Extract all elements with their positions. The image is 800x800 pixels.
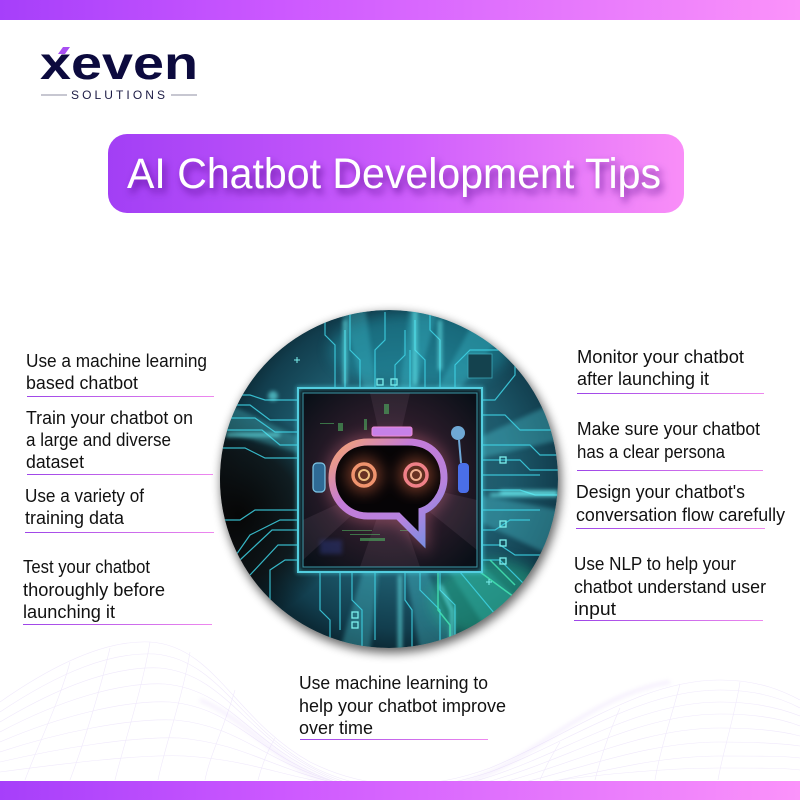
chip inner die xyxy=(303,393,477,567)
tip: monitor after launch: after launching it xyxy=(577,368,709,389)
tip: train on diverse dataset: a large and diverse xyxy=(26,429,171,450)
tip: improve over time: help your chatbot improve xyxy=(299,695,506,716)
tip: train on diverse dataset: dataset xyxy=(26,451,84,472)
robot eye glow xyxy=(346,457,434,493)
tip: test thoroughly: thoroughly before xyxy=(23,579,165,600)
tip: variety of training data: Use a variety of xyxy=(25,485,145,506)
chip outer frame xyxy=(298,388,482,572)
green data specks xyxy=(320,404,412,541)
robot antenna xyxy=(451,426,465,463)
top gradient bar xyxy=(0,0,800,20)
central circuit illustration xyxy=(220,310,558,648)
robot left ear xyxy=(313,463,325,492)
tip: variety of training data xyxy=(25,485,214,533)
tip: improve over time: Use machine learning to xyxy=(299,672,488,693)
tip: test thoroughly: Test your chatbot xyxy=(23,556,150,577)
robot top bar xyxy=(372,427,412,436)
tip: conversation flow: Design your chatbot's xyxy=(576,481,745,502)
light rays xyxy=(220,305,560,650)
title banner: AI Chatbot Development Tips xyxy=(127,150,661,198)
small chip top right xyxy=(468,354,492,378)
tip: use NLP: Use NLP to help your xyxy=(574,553,736,574)
tip: use NLP: chatbot understand user xyxy=(574,576,766,597)
tip: test thoroughly: launching it xyxy=(23,601,115,622)
tip: monitor after launch: Monitor your chatbot xyxy=(577,346,744,367)
tip: conversation flow xyxy=(576,481,786,529)
logo: Xeven Solutions: SOLUTIONS xyxy=(71,88,165,102)
tip: machine learning based chatbot: Use a machine learning xyxy=(26,350,207,371)
tip: train on diverse dataset xyxy=(26,407,213,475)
background wave mesh xyxy=(0,642,800,797)
tip: machine learning based chatbot: based chatbot xyxy=(26,372,138,393)
lower right green glow xyxy=(430,560,550,640)
tip: clear persona: Make sure your chatbot xyxy=(577,418,760,439)
robot glow xyxy=(332,442,444,540)
chip rays xyxy=(303,393,477,567)
tip: machine learning based chatbot xyxy=(26,350,214,397)
robot head and speech bubble xyxy=(332,442,444,540)
circuit nodes xyxy=(294,357,506,628)
circuit traces xyxy=(222,310,560,650)
upper teal glow xyxy=(330,312,510,388)
tip: clear persona: has a clear persona xyxy=(577,441,726,462)
tip: use NLP: input xyxy=(574,598,616,619)
title banner xyxy=(108,134,684,213)
tip: monitor after launch xyxy=(577,346,764,394)
bottom gradient bar xyxy=(0,781,800,800)
bright circuit accents xyxy=(226,310,558,650)
tip: clear persona xyxy=(577,418,763,471)
tip: conversation flow: conversation flow carefully xyxy=(576,504,786,525)
disc shadow xyxy=(221,313,561,653)
tip: use NLP xyxy=(574,553,766,621)
wave highlight ridge xyxy=(200,682,670,792)
logo: Xeven Solutions: xeven xyxy=(40,37,198,89)
tip: test thoroughly xyxy=(23,556,212,625)
robot right ear xyxy=(458,463,469,493)
tip: train on diverse dataset: Train your chatbot on xyxy=(26,407,193,428)
tip: improve over time xyxy=(299,672,506,740)
blue specks xyxy=(320,540,342,554)
robot right eye xyxy=(405,464,427,486)
tip: variety of training data: training data xyxy=(25,507,125,528)
tip: improve over time: over time xyxy=(299,717,373,738)
robot left eye xyxy=(353,464,375,486)
logo: Xeven Solutions xyxy=(40,37,198,102)
bright green traces xyxy=(437,560,516,637)
